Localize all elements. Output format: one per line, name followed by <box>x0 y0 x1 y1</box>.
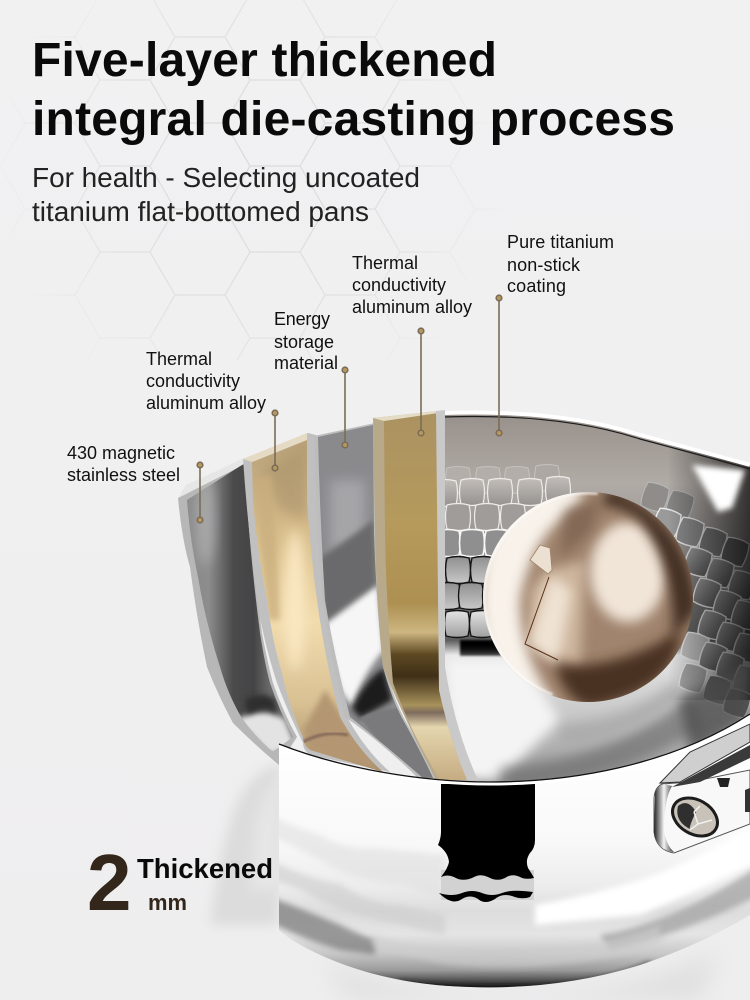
label: 430 magnetic stainless steel <box>67 443 180 485</box>
handle rivet bracket <box>654 724 750 853</box>
hexagon background pattern <box>46 0 458 360</box>
label: thermal conductivity aluminum alloy, left: conductivity <box>146 371 240 391</box>
label: thermal conductivity aluminum alloy, right: Thermal <box>352 253 418 273</box>
label: pure titanium non-stick coating: coating <box>507 276 566 296</box>
hammered cells right <box>640 482 694 518</box>
pot outer body with hammered finish <box>270 714 750 990</box>
titanium ball <box>483 492 693 702</box>
thickness callout: 2 mm thickened: mm <box>148 890 187 915</box>
label: energy storage material: Energy <box>274 309 330 329</box>
interior: pure titanium non-stick coating <box>432 410 750 790</box>
subtitle: titanium flat-bottomed pans <box>32 196 369 227</box>
black reflection strip <box>441 870 534 900</box>
callout lines and dots <box>197 295 502 523</box>
label: energy storage material: material <box>274 353 338 373</box>
thickness callout: 2 mm thickened <box>87 838 273 927</box>
subtitle <box>32 162 420 227</box>
label: 430 magnetic stainless steel: 430 magnetic <box>67 443 175 463</box>
label: pure titanium non-stick coating <box>507 232 614 296</box>
label: thermal conductivity aluminum alloy, left: Thermal <box>146 349 212 369</box>
thickness callout: 2 mm thickened: 2 <box>87 838 132 927</box>
layer 2: thermal conductivity aluminum alloy <box>243 433 390 775</box>
layer 4: thermal conductivity aluminum alloy <box>373 410 478 780</box>
label: thermal conductivity aluminum alloy, left: aluminum alloy <box>146 393 266 413</box>
label: pure titanium non-stick coating: Pure titanium <box>507 232 614 252</box>
interior highlights <box>672 446 750 700</box>
layer 3: energy storage material <box>314 423 440 780</box>
label: energy storage material <box>274 309 338 373</box>
title: integral die-casting process <box>32 93 675 146</box>
hammered bands <box>279 820 444 882</box>
label: thermal conductivity aluminum alloy, right: aluminum alloy <box>352 297 472 317</box>
pan cross-section <box>178 410 750 990</box>
reflection shadow of pot on the table <box>210 762 720 1000</box>
label: thermal conductivity aluminum alloy, right <box>352 253 472 317</box>
title <box>32 34 675 146</box>
layer 1: 430 magnetic stainless steel <box>178 455 300 765</box>
thickness callout: 2 mm thickened: Thickened <box>137 853 273 884</box>
hammered cells left <box>446 464 560 494</box>
label: 430 magnetic stainless steel: stainless steel <box>67 465 180 485</box>
label: thermal conductivity aluminum alloy, left <box>146 349 266 413</box>
title: Five-layer thickened <box>32 34 497 87</box>
bottom dark edge <box>400 962 660 990</box>
label: pure titanium non-stick coating: non-stick <box>507 255 581 275</box>
label: thermal conductivity aluminum alloy, right: conductivity <box>352 275 446 295</box>
label: energy storage material: storage <box>274 332 334 352</box>
subtitle: For health - Selecting uncoated <box>32 162 420 193</box>
